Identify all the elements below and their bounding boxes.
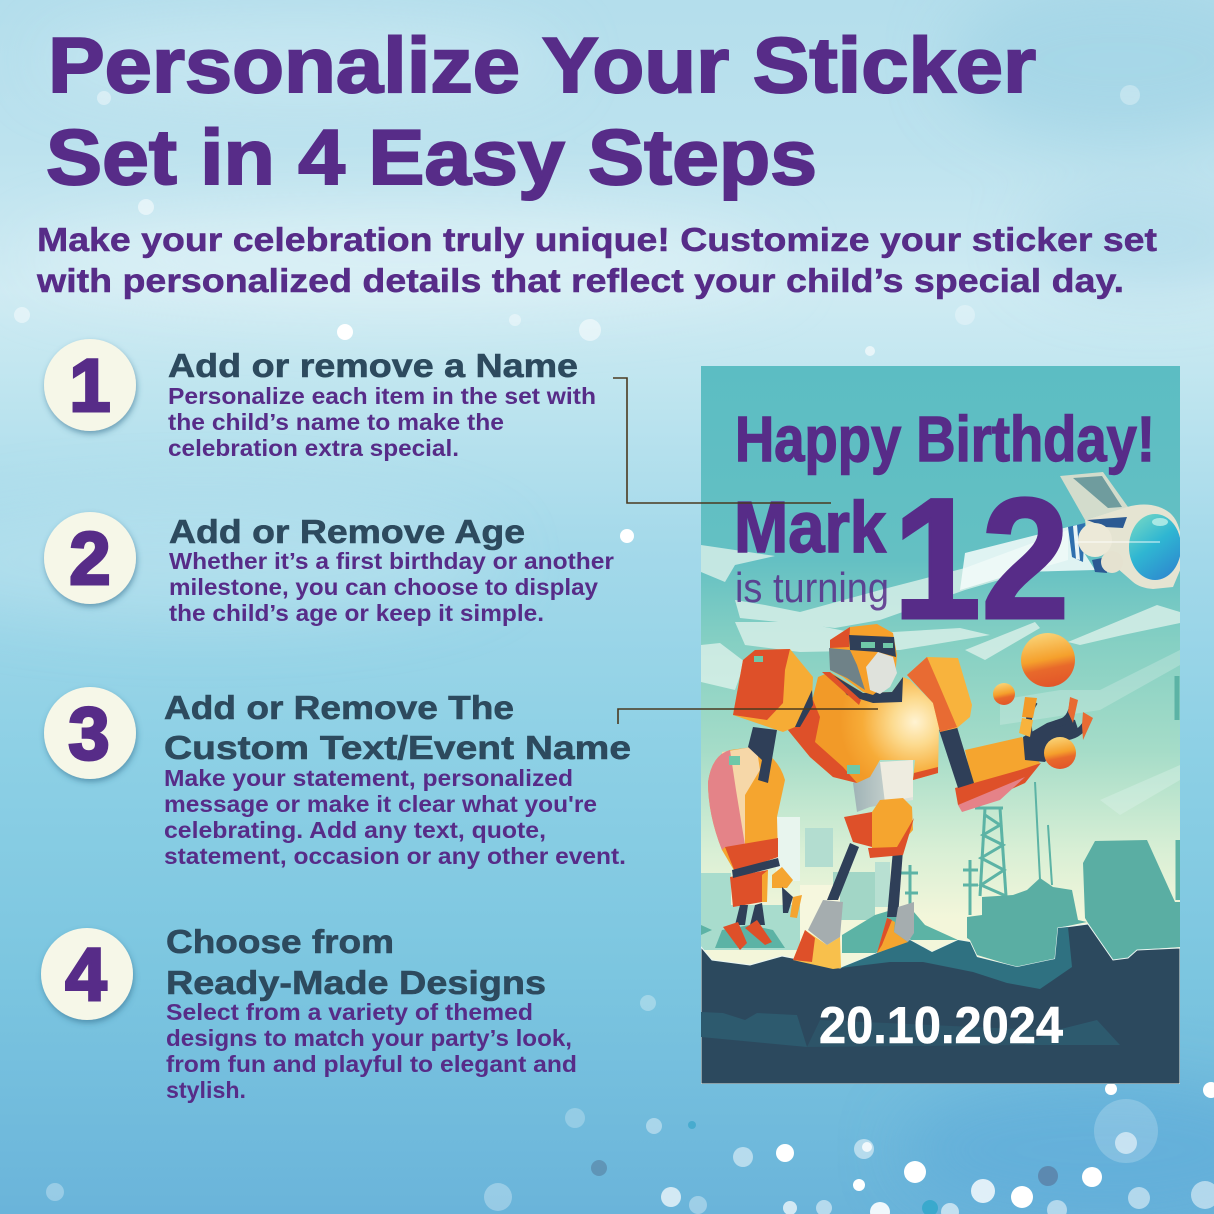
step 1 description: the child’s name to make the — [168, 409, 504, 435]
sticker card — [701, 366, 1181, 1084]
right arm — [939, 727, 1041, 812]
step 3 heading — [164, 689, 631, 766]
step 4 number badge: 4 — [65, 933, 107, 1016]
step 4 — [41, 923, 577, 1103]
step 2 number badge — [44, 512, 136, 604]
connector line: custom text — [618, 709, 878, 724]
right foot — [877, 918, 908, 953]
right shoulder — [907, 657, 972, 732]
step 3 number badge: 3 — [68, 692, 110, 775]
legs — [827, 843, 859, 900]
step 4 description: from fun and playful to elegant and — [166, 1051, 577, 1077]
card sky — [701, 366, 1180, 967]
step 3 description: Make your statement, personalized — [164, 765, 573, 791]
left forearm — [708, 747, 802, 950]
connector line: name — [613, 378, 831, 503]
step 4 heading — [166, 923, 546, 1001]
hand — [1019, 697, 1093, 762]
step 4 description: Select from a variety of themed — [166, 999, 533, 1025]
subtitle: Make your celebration truly unique! Customize your sticker set — [37, 221, 1157, 258]
step 1 description — [168, 383, 596, 461]
step 4 heading: Ready-Made Designs — [166, 964, 546, 1001]
step 1 heading: Add or remove a Name — [168, 347, 578, 384]
step 2 description — [169, 548, 614, 626]
left foot — [793, 930, 841, 969]
step 2 description: Whether it’s a first birthday or another — [169, 548, 614, 574]
step 2 description: milestone, you can choose to display — [169, 574, 598, 600]
step 1 number badge — [44, 339, 136, 431]
waist — [853, 760, 913, 812]
juggled balls — [1021, 633, 1075, 687]
step 4 number badge — [41, 928, 133, 1020]
step 2 description: the child’s age or keep it simple. — [169, 600, 544, 626]
step 4 description: stylish. — [166, 1077, 246, 1103]
ground — [701, 924, 1180, 1084]
step 2 — [44, 512, 614, 626]
left upper arm — [748, 727, 777, 783]
step 4 description: designs to match your party’s look, — [166, 1025, 572, 1051]
age number: 12 — [893, 463, 1069, 655]
step 1 — [44, 339, 596, 461]
step 3 description: statement, occasion or any other event. — [164, 843, 626, 869]
name: Mark: Mark — [734, 488, 887, 568]
step 1 description: Personalize each item in the set with — [168, 383, 596, 409]
step 3 description — [164, 765, 626, 869]
subtitle: with personalized details that reflect your child’s special day. — [36, 262, 1124, 299]
title: Set in 4 Easy Steps — [46, 113, 817, 201]
event date: 20.10.2024 — [819, 997, 1063, 1055]
spaceship — [960, 472, 1181, 590]
step 3 heading: Add or Remove The — [164, 689, 514, 726]
step 4 heading: Choose from — [166, 923, 394, 960]
background skyline — [701, 817, 958, 953]
sky clouds — [701, 530, 1180, 815]
subtitle — [36, 221, 1157, 299]
teal buildings — [967, 840, 1180, 967]
step 2 heading: Add or Remove Age — [169, 513, 525, 550]
torso — [788, 672, 939, 783]
lattice tower and masts — [900, 676, 1178, 915]
title — [46, 21, 1036, 201]
step 2 number badge: 2 — [69, 517, 111, 600]
hip — [872, 798, 913, 848]
step 4 description — [166, 999, 577, 1103]
step 3 description: celebrating. Add any text, quote, — [164, 817, 546, 843]
is turning: is turning — [735, 564, 889, 611]
step 3 heading: Custom Text/Event Name — [164, 729, 631, 766]
robot — [708, 624, 1093, 969]
step 3 number badge — [44, 687, 136, 779]
step 3 description: message or make it clear what you're — [164, 791, 597, 817]
title: Personalize Your Sticker — [48, 21, 1036, 109]
step 3 — [44, 687, 631, 869]
left shoulder — [733, 649, 813, 732]
step 1 number badge: 1 — [69, 344, 111, 427]
step 1 description: celebration extra special. — [168, 435, 459, 461]
head — [829, 624, 897, 695]
